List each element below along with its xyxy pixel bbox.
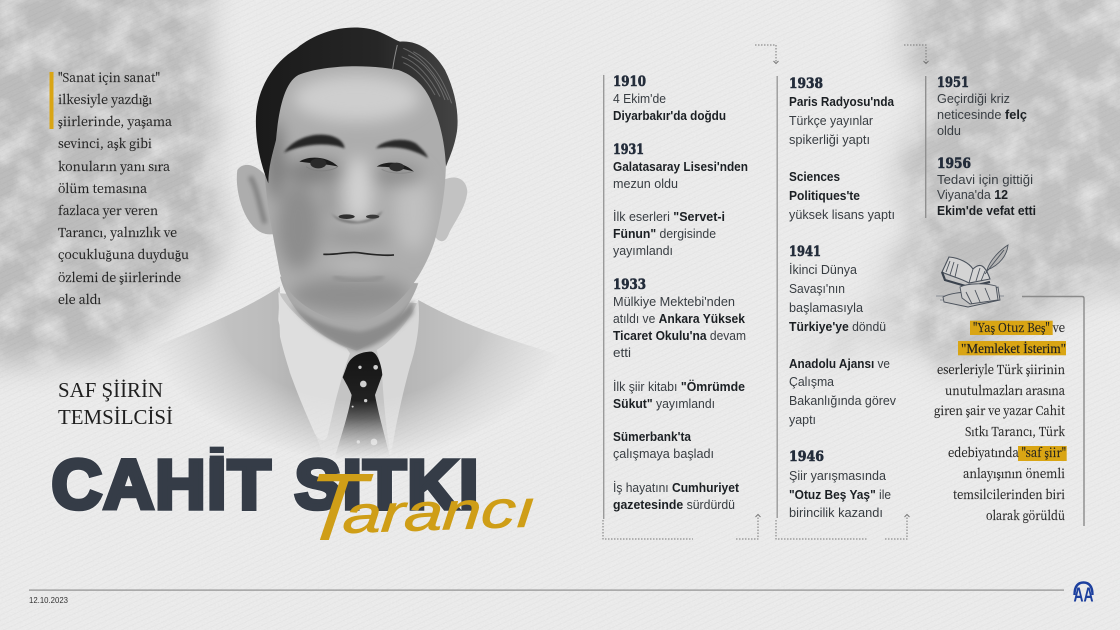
title words: SITKI — [294, 446, 478, 524]
1933: çalışmaya başladı — [613, 447, 714, 461]
logo: AA — [1074, 582, 1094, 606]
1951: 1951 — [937, 75, 969, 91]
portrait: ears — [237, 165, 467, 241]
summary highlights — [958, 321, 1067, 461]
1933: Sümerbank'ta — [613, 430, 692, 444]
1933: Mülkiye Mektebi'nden — [613, 295, 735, 309]
1931: mezun oldu — [613, 177, 678, 191]
title: Tarancı script — [297, 454, 537, 561]
icon: books and quill — [936, 245, 1008, 307]
1938: yüksek lisans yaptı — [789, 208, 895, 222]
1931: yayımlandı — [613, 244, 673, 258]
1931: İlk eserleri "Servet-i — [613, 210, 725, 224]
subtitle — [58, 378, 173, 429]
timeline column 1 — [603, 74, 748, 519]
left intro text: "Sanat için sanat" — [58, 68, 160, 86]
1938: Paris Radyosu'nda — [789, 95, 895, 109]
bracket for summary — [1022, 296, 1084, 526]
left intro text: ölüm temasına — [58, 179, 147, 197]
left intro text: şiirlerinde, yaşama — [58, 112, 172, 130]
title: Cahit Sıtkı — [52, 446, 478, 524]
left intro text: fazlaca yer veren — [58, 201, 158, 219]
1933: etti — [613, 346, 631, 360]
1933: gazetesinde sürdürdü — [613, 498, 735, 512]
1941: Savaşı'nın — [789, 282, 845, 296]
portrait: face — [265, 66, 446, 315]
1941 — [789, 244, 897, 427]
1910: Diyarbakır'da doğdu — [613, 109, 726, 123]
1941: başlamasıyla — [789, 301, 863, 315]
portrait: chin shadow on neck — [290, 300, 413, 351]
summary text: "Yaş Otuz Beş" ve — [973, 318, 1065, 336]
1938 — [789, 76, 895, 222]
summary text: giren şair ve yazar Cahit — [934, 401, 1065, 419]
1956: Ekim'de vefat etti — [937, 204, 1036, 218]
1931: 1931 — [613, 142, 644, 158]
1910: 4 Ekim'de — [613, 92, 666, 106]
1956: Tedavi için gittiği — [937, 173, 1033, 187]
1946: 1946 — [789, 449, 824, 465]
timeline rule — [603, 75, 604, 519]
left intro text: konuların yanı sıra — [58, 157, 170, 175]
summary text: temsilcilerinden biri — [953, 485, 1065, 503]
1956: Viyana'da 12 — [937, 188, 1008, 202]
1931: Fünun" dergisinde — [613, 227, 716, 241]
summary text: Sıtkı Tarancı, Türk — [965, 422, 1065, 440]
1956 — [937, 156, 1036, 218]
left intro text: Tarancı, yalnızlık ve — [58, 223, 177, 241]
left intro text: ele aldı — [58, 290, 102, 308]
portrait: nose and mouth — [323, 211, 394, 280]
1951: Geçirdiği kriz — [937, 92, 1010, 106]
gap under the dot of İ — [203, 453, 229, 456]
1933: Sükut" yayımlandı — [613, 397, 715, 411]
summary text: "Memleket İsterim" — [961, 341, 1066, 356]
1933 — [613, 277, 746, 512]
1941: Anadolu Ajansı ve — [789, 357, 890, 371]
left intro text: özlemi de şiirlerinde — [58, 268, 181, 286]
1941: yaptı — [789, 413, 816, 427]
1951: oldu — [937, 124, 961, 138]
1941: 1941 — [789, 244, 821, 260]
timeline rule — [776, 76, 778, 518]
timeline rule — [925, 76, 926, 218]
1931 — [613, 142, 748, 258]
summary text: anlayışının önemli — [963, 464, 1065, 482]
1941: İkinci Dünya — [789, 263, 857, 277]
summary text: olarak görüldü — [986, 506, 1065, 524]
portrait: Cahit Sıtkı Tarancı — [100, 27, 640, 487]
1933: İş hayatını Cumhuriyet — [613, 481, 740, 495]
1938: Politiques'te — [789, 189, 860, 203]
summary text: edebiyatında "saf şiir" — [948, 443, 1066, 461]
date: 12.10.2023 — [29, 596, 69, 605]
portrait: hair — [256, 27, 458, 183]
1910: 1910 — [613, 74, 646, 90]
subtitle: TEMSİLCİSİ — [58, 405, 173, 429]
summary text — [934, 318, 1066, 524]
1933: İlk şiir kitabı "Ömrümde — [613, 379, 745, 394]
1956: 1956 — [937, 156, 971, 172]
1941: Çalışma — [789, 375, 834, 389]
1938: Sciences — [789, 170, 840, 184]
title words: CAHİT — [52, 446, 270, 524]
subtitle: SAF ŞİİRİN — [58, 378, 163, 402]
1951 — [937, 75, 1027, 138]
left intro text — [58, 68, 189, 308]
1951: neticesinde felç — [937, 108, 1027, 122]
1933: 1933 — [613, 277, 646, 293]
dotted connector arrows — [603, 45, 928, 539]
1931: Galatasaray Lisesi'nden — [613, 160, 748, 174]
1938: 1938 — [789, 76, 823, 92]
1941: Türkiye'ye döndü — [789, 320, 886, 334]
left intro text: çocukluğuna duyduğu — [58, 245, 189, 263]
1941: Bakanlığında görev — [789, 394, 897, 408]
title words — [52, 446, 478, 524]
title: Tarancı script: arancı — [341, 480, 537, 545]
quote bar — [50, 72, 54, 129]
left intro text: ilkesiyle yazdığı — [58, 90, 153, 108]
1933: Ticaret Okulu'na devam — [613, 329, 746, 343]
1946: birincilik kazandı — [789, 506, 883, 520]
title: Tarancı script: T — [297, 454, 377, 561]
1946: "Otuz Beş Yaş" ile — [789, 488, 891, 502]
portrait: brows and eyes — [284, 135, 428, 173]
1910 — [613, 74, 726, 123]
1933: atıldı ve Ankara Yüksek — [613, 312, 745, 326]
1938: spikerliği yaptı — [789, 133, 870, 147]
timeline column 2 — [776, 76, 897, 520]
left intro text: sevinci, aşk gibi — [58, 134, 152, 152]
portrait: neck — [280, 277, 418, 351]
footer rule — [29, 590, 1064, 591]
timeline column 3 — [925, 75, 1036, 218]
summary text: eserleriyle Türk şiirinin — [937, 360, 1065, 378]
portrait: suit, collar and tie — [168, 286, 538, 456]
1938: Türkçe yayınlar — [789, 114, 873, 128]
summary text: unutulmazları arasına — [945, 381, 1065, 399]
1946 — [789, 449, 891, 520]
logo: AA: AA — [1074, 584, 1094, 606]
1946: Şiir yarışmasında — [789, 469, 886, 483]
